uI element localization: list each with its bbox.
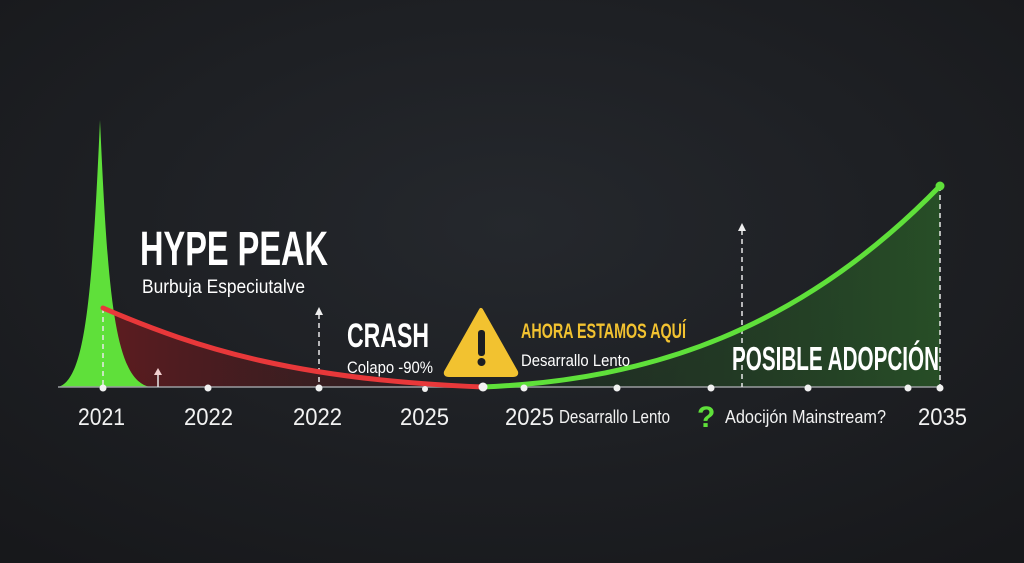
heading: hype peak: HYPE PEAK (140, 223, 328, 276)
axis labels: 2022 (293, 404, 342, 431)
axis labels: 2022 (184, 404, 233, 431)
chart: hype cycle (58, 120, 944, 392)
heading: crash: Colapo -90% (347, 358, 433, 377)
callout: ahora estamos aqui: AHORA ESTAMOS AQUÍ (521, 320, 687, 343)
axis labels: 2025 (505, 404, 554, 431)
axis (58, 386, 940, 388)
heading: hype peak: Burbuja Especiutalve (142, 277, 305, 298)
red area fill (103, 308, 483, 387)
axis labels: Adocijón Mainstream? (725, 407, 886, 427)
heading: crash (347, 317, 433, 377)
callout: ahora estamos aqui (521, 320, 687, 370)
callout: ahora estamos aqui: Desarrallo Lento (521, 351, 630, 370)
axis labels: 2025 (400, 404, 449, 431)
red decline curve (103, 308, 483, 387)
dashed markers (103, 186, 940, 387)
axis labels: ? (697, 401, 715, 434)
heading: crash: CRASH (347, 317, 429, 355)
axis labels: Desarrallo Lento (559, 407, 670, 427)
green adoption area fill (483, 186, 940, 387)
green hype spike (58, 120, 150, 387)
axis dots (100, 382, 944, 392)
axis labels: 2021 (78, 404, 125, 431)
green growth curve (483, 186, 940, 387)
axis labels (78, 401, 967, 434)
heading: hype peak (140, 223, 328, 298)
icon: warning triangle (446, 310, 516, 375)
axis labels: 2035 (918, 404, 967, 431)
